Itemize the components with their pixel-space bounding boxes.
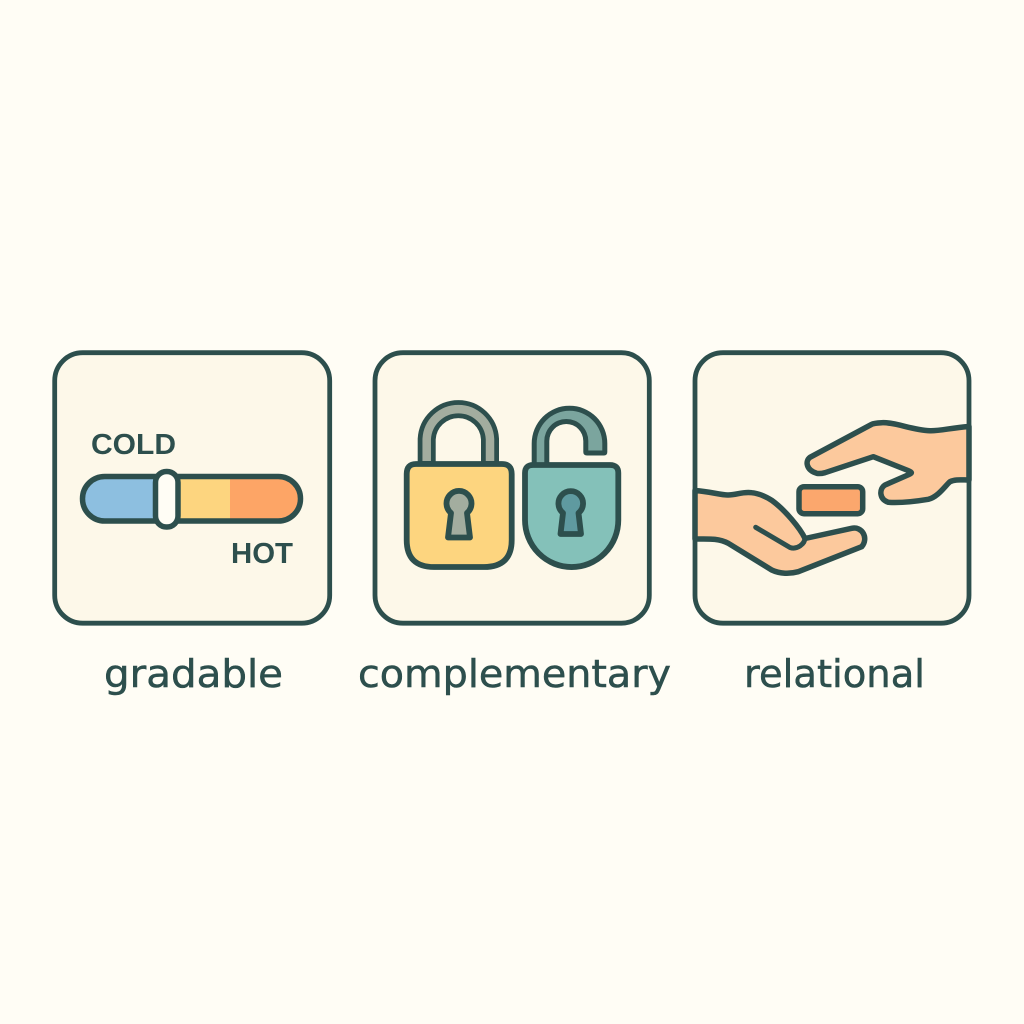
label: COLD: COLD bbox=[91, 429, 176, 461]
heading: relational: relational bbox=[744, 652, 925, 696]
thumb crease bbox=[756, 527, 805, 548]
icon: upper giving hand bbox=[807, 423, 969, 502]
slider: temperature scale bbox=[82, 472, 300, 527]
panel frame: relational bbox=[695, 353, 969, 623]
slider handle bbox=[156, 472, 178, 527]
heading: gradable: gradable bbox=[104, 652, 283, 696]
panel: relational bbox=[695, 353, 969, 623]
icon: closed padlock bbox=[407, 409, 512, 567]
panel: gradable bbox=[55, 353, 330, 623]
panel frame: complementary bbox=[375, 353, 649, 623]
label: HOT: HOT bbox=[231, 538, 293, 570]
heading: complementary: complementary bbox=[358, 652, 671, 696]
icon: open padlock bbox=[525, 406, 618, 567]
panel: complementary bbox=[375, 353, 649, 623]
panel frame: gradable bbox=[55, 353, 330, 623]
icon: token passed between hands bbox=[799, 487, 863, 514]
icon: lower receiving hand bbox=[695, 490, 865, 573]
